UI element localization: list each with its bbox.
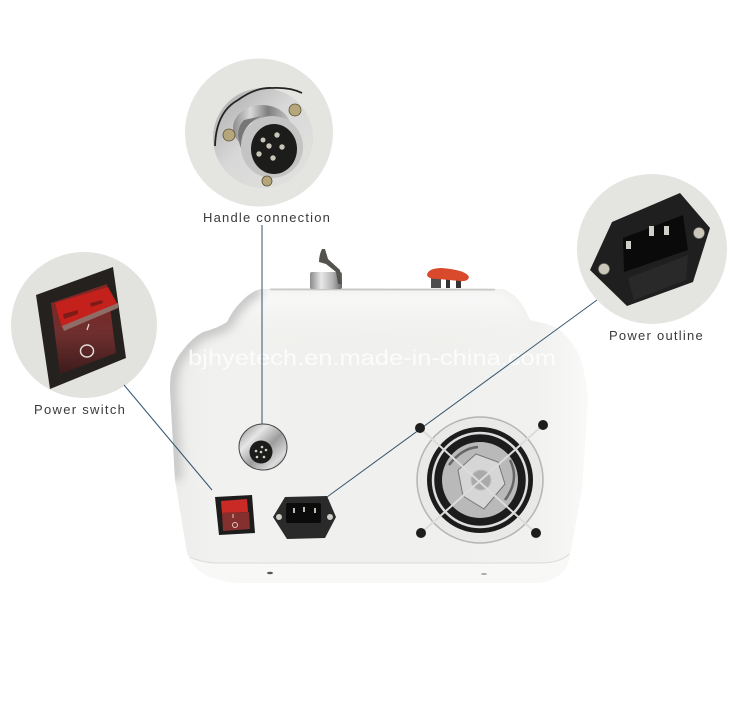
- cooling fan: [415, 417, 548, 543]
- power socket on panel: [273, 496, 336, 539]
- label: power outlet: Power outline: [609, 328, 704, 343]
- connector on panel: [239, 424, 287, 470]
- circle: power switch detail: [11, 252, 157, 398]
- circle: handle connection detail: [185, 58, 333, 206]
- red top button: [427, 268, 469, 288]
- watermark: bjhyetech.en.made-in-china.com: [188, 346, 556, 370]
- bottom feet holes: [267, 572, 487, 575]
- top knob: [310, 249, 342, 289]
- leader line: power outlet: [327, 300, 597, 497]
- rocker switch on panel: [215, 495, 255, 535]
- leader line: power switch: [124, 385, 212, 490]
- label: handle connection: Handle connection: [203, 210, 331, 225]
- device body: [170, 289, 588, 583]
- circle: power outlet detail: [577, 174, 727, 324]
- leader line: handle connection: [261, 225, 263, 428]
- label: power switch: Power switch: [34, 402, 126, 417]
